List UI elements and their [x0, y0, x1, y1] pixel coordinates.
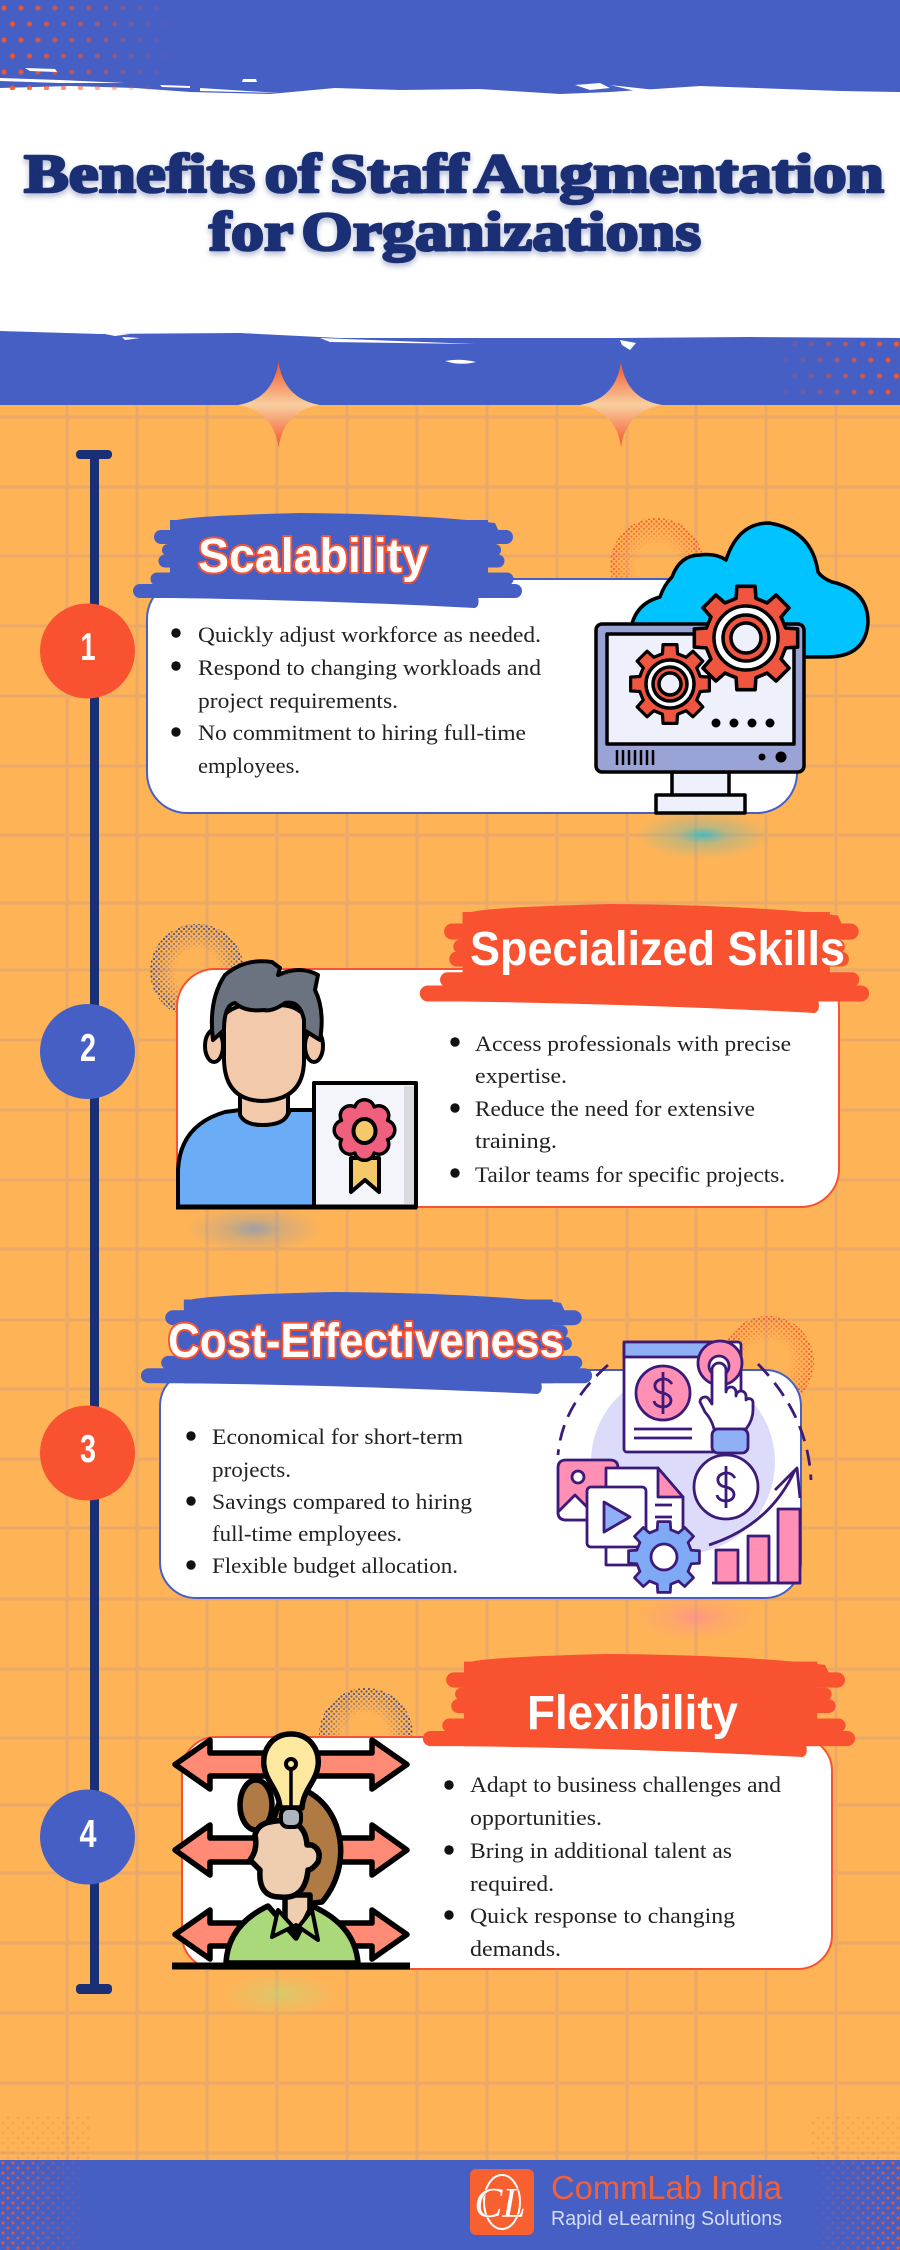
brush heading 2: Specialized Skills	[470, 923, 845, 976]
brush heading 1: Scalability	[198, 530, 428, 583]
number badge 3: 3	[80, 1428, 96, 1471]
number badge 1: 1	[80, 626, 96, 669]
card 1	[147, 579, 797, 813]
number badge 4	[40, 1790, 135, 1884]
header band: white title area with brushed blue edges	[0, 0, 900, 405]
bullet list 3	[186, 1424, 472, 1578]
icon: flexible person with arrows and light bulb	[172, 1734, 410, 1966]
number badge 4: 4	[80, 1813, 97, 1856]
logo: CommLab India mark: CL	[474, 2181, 526, 2227]
bullet list 4: Adapt to business challenges and	[470, 1772, 781, 1797]
bullet list 4: required.	[470, 1871, 554, 1896]
bullet list 2: Reduce the need for extensive	[475, 1096, 755, 1121]
card 3	[160, 1370, 801, 1598]
icon: person with certificate	[176, 961, 417, 1207]
bullet list 1	[171, 622, 541, 778]
section 4: Flexibility	[40, 1654, 847, 2016]
number badge 3	[40, 1406, 135, 1500]
bullet list 4: opportunities.	[470, 1805, 602, 1830]
title	[24, 143, 884, 262]
icon: left star	[238, 362, 320, 447]
bullet list 3: projects.	[212, 1457, 291, 1482]
bullet list 4	[444, 1772, 781, 1961]
brush heading 4	[431, 1654, 847, 1757]
number badge 2: 2	[80, 1027, 96, 1070]
bullet list 2: Tailor teams for specific projects.	[475, 1162, 785, 1187]
brand tagline: Rapid eLearning Solutions	[551, 2208, 782, 2230]
brush heading 1	[140, 513, 515, 608]
bullet list 2: expertise.	[475, 1063, 567, 1088]
card 4	[182, 1737, 832, 1969]
logo: CommLab India mark	[470, 2169, 534, 2235]
title: Benefits of Staff Augmentation	[24, 143, 884, 204]
icon: cloud monitor with gears	[596, 523, 868, 813]
icon: right star	[580, 362, 662, 447]
bullet list 3: Savings compared to hiring	[212, 1489, 472, 1514]
bullet list 2	[450, 1031, 791, 1187]
icon: budget, documents and growth chart	[558, 1341, 811, 1592]
brush heading 4: Flexibility	[527, 1687, 738, 1740]
bullet list 4: Quick response to changing	[470, 1903, 735, 1928]
brush heading 3: Cost-Effectiveness	[168, 1315, 564, 1368]
section 1: Scalability	[40, 513, 868, 859]
footer band	[0, 2115, 900, 2250]
bullet list 3: full-time employees.	[212, 1521, 402, 1546]
brand name: CommLab India	[551, 2169, 783, 2206]
bullet list 3: Economical for short-term	[212, 1424, 463, 1449]
bullet list 1: employees.	[198, 753, 300, 778]
section 2: Specialized Skills	[40, 904, 861, 1253]
number badge 2	[40, 1004, 135, 1099]
bullet list 1: No commitment to hiring full-time	[198, 720, 526, 745]
bullet list 3: Flexible budget allocation.	[212, 1553, 458, 1578]
bullet list 2: Access professionals with precise	[475, 1031, 791, 1056]
brush heading 2	[428, 904, 861, 1013]
bullet list 1: project requirements.	[198, 688, 398, 713]
title: for Organizations	[209, 201, 701, 262]
timeline line	[76, 450, 112, 1994]
bullet list 1: Quickly adjust workforce as needed.	[198, 622, 541, 647]
bullet list 4: demands.	[470, 1936, 561, 1961]
section 3: Cost-Effectiveness	[40, 1292, 814, 1641]
bullet list 4: Bring in additional talent as	[470, 1838, 732, 1863]
brush heading 3	[149, 1292, 584, 1394]
bullet list 2: training.	[475, 1128, 557, 1153]
number badge 1	[40, 604, 135, 698]
bullet list 1: Respond to changing workloads and	[198, 655, 541, 680]
card 2	[177, 969, 839, 1207]
